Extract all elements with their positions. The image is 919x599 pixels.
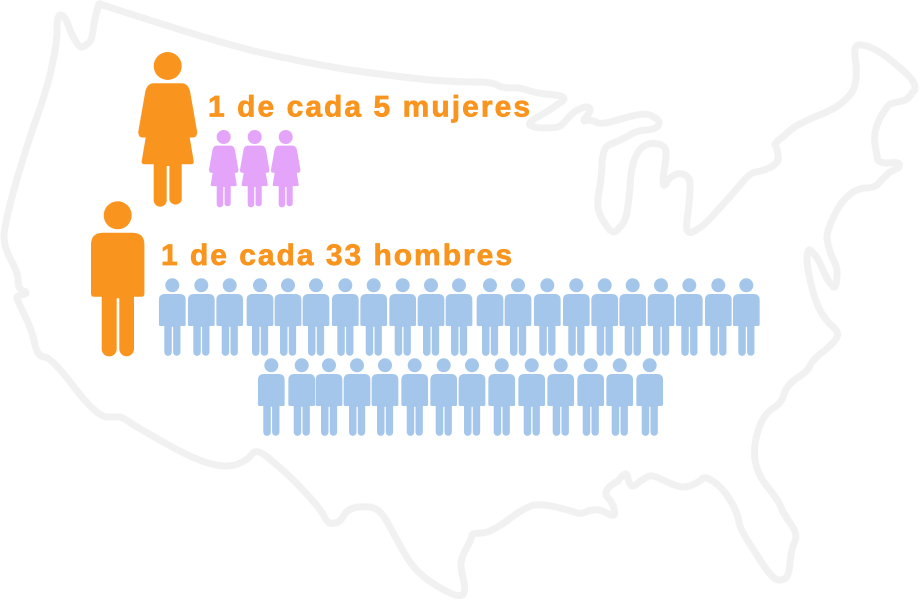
icon group: second row of blue men xyxy=(258,358,663,436)
icon: large orange woman xyxy=(138,52,197,207)
icon group: three purple women xyxy=(209,130,300,207)
heading: 1 de cada 33 hombres: 1 de cada 33 hombres xyxy=(161,239,512,272)
heading: 1 de cada 5 mujeres: 1 de cada 5 mujeres xyxy=(208,91,530,124)
icon: large orange man xyxy=(91,201,144,356)
icon group: first row of blue men xyxy=(159,278,760,356)
